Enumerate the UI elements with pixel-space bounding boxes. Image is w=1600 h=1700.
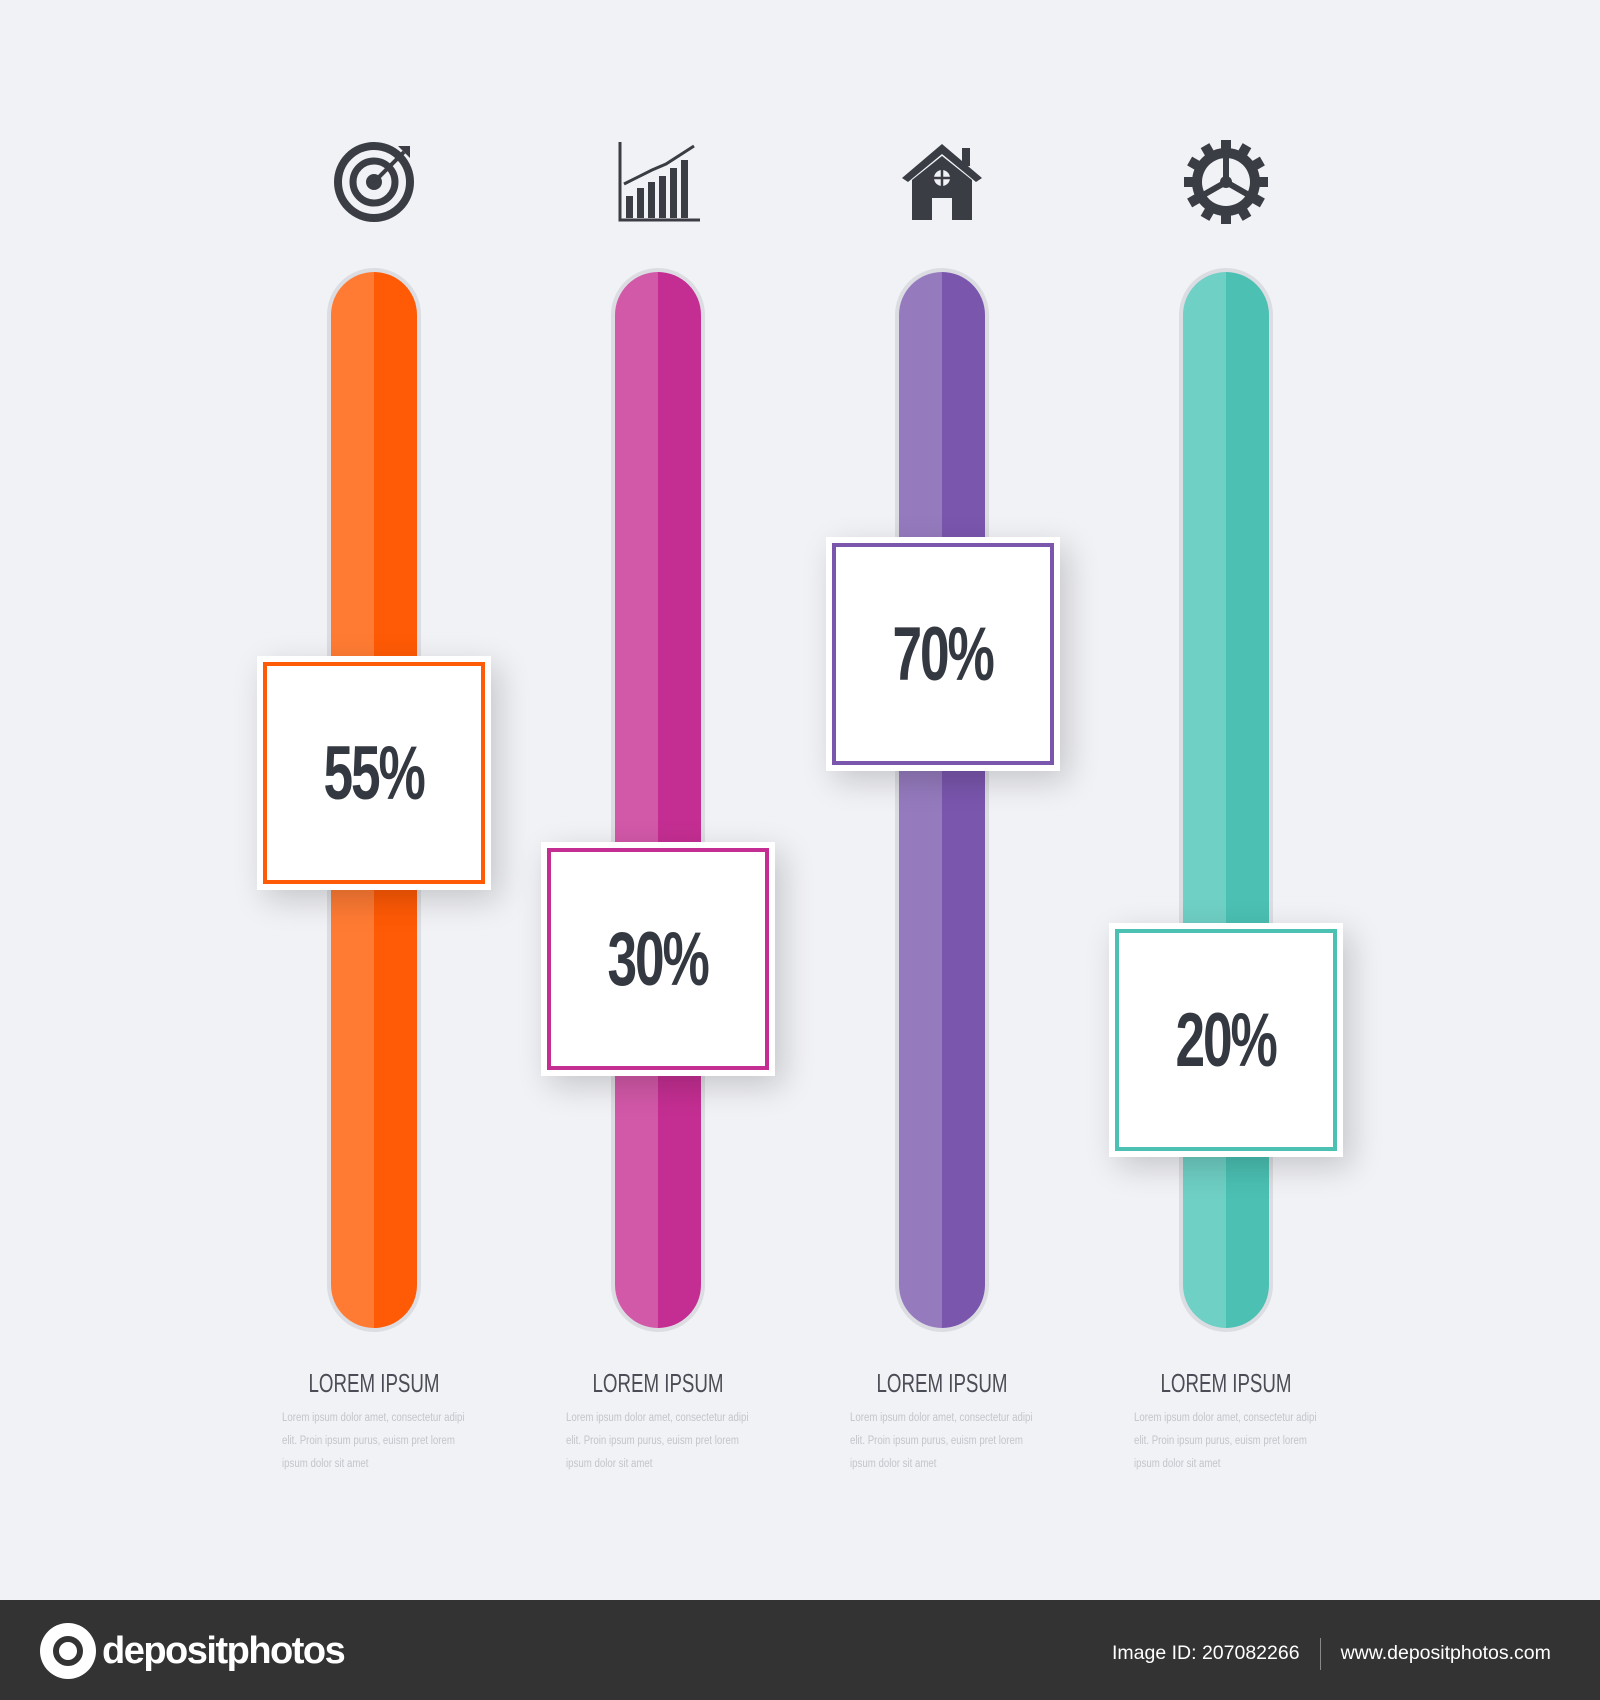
box: 20%: 20% [1176,998,1276,1082]
bar: pink [611,268,705,1332]
label 2: ipsum dolor sit amet [566,1458,652,1470]
label 3: LOREM IPSUM [876,1368,1008,1398]
box: 70%: 70% [893,612,993,696]
icon: bar chart [618,142,700,222]
box: 55%: 55% [324,730,424,816]
label 3 [850,1368,1033,1470]
box: 70% [826,537,1060,771]
box: 30% [541,842,775,1076]
label 3: Lorem ipsum dolor amet, consectetur adipi [850,1412,1033,1424]
label 1 [282,1368,465,1470]
label 1: Lorem ipsum dolor amet, consectetur adipi [282,1412,465,1424]
footer [0,1600,1600,1700]
footer logo [40,1623,344,1679]
icon: gear [1184,140,1268,224]
icon: house [902,144,982,220]
label 3: ipsum dolor sit amet [850,1458,936,1470]
label 4: elit. Proin ipsum purus, euism pret lorem [1134,1435,1307,1447]
label 2: Lorem ipsum dolor amet, consectetur adipi [566,1412,749,1424]
label 4 [1134,1368,1317,1470]
label 2: elit. Proin ipsum purus, euism pret lorem [566,1435,739,1447]
box: 20% [1109,923,1343,1157]
label 1: elit. Proin ipsum purus, euism pret lorem [282,1435,455,1447]
label 4: Lorem ipsum dolor amet, consectetur adipi [1134,1412,1317,1424]
footer logo: depositphotos [102,1630,344,1672]
icon: target [334,142,414,222]
bar: orange [327,268,421,1332]
label 1: LOREM IPSUM [308,1368,440,1398]
box: 30%: 30% [608,916,708,1002]
bar: teal [1179,268,1273,1332]
box: 55% [257,656,491,890]
label 4: ipsum dolor sit amet [1134,1458,1220,1470]
label 3: elit. Proin ipsum purus, euism pret lorem [850,1435,1023,1447]
label 2 [566,1368,749,1470]
bar: purple [895,268,989,1332]
footer info: Image ID: 207082266 www.depositphotos.com [1112,1642,1551,1664]
label 4: LOREM IPSUM [1160,1368,1292,1398]
label 2: LOREM IPSUM [592,1368,724,1398]
label 1: ipsum dolor sit amet [282,1458,368,1470]
